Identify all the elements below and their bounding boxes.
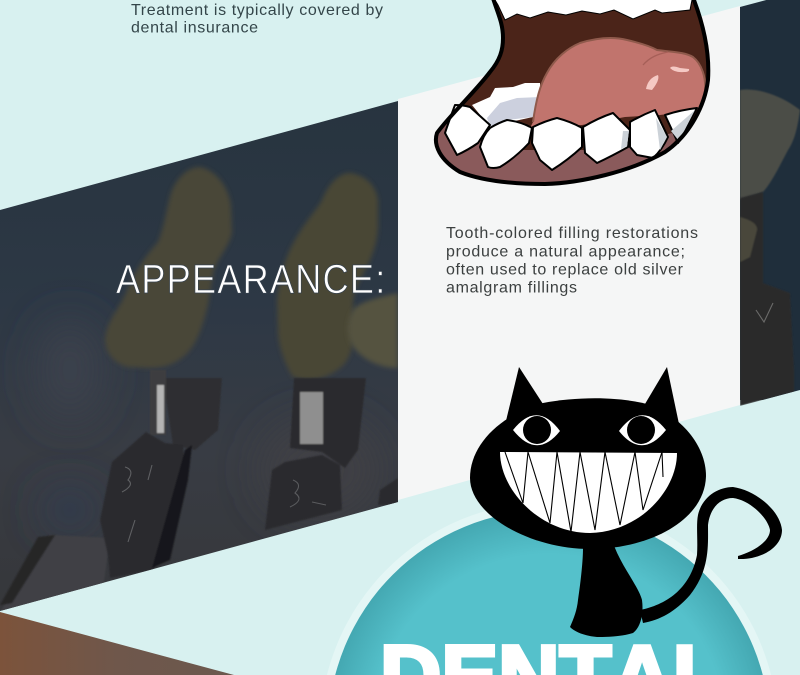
cat left eye xyxy=(513,415,560,445)
shade tab two engraved marks xyxy=(290,480,326,507)
heading: appearance: APPEARANCE: xyxy=(116,257,385,303)
tongue highlights xyxy=(670,66,689,72)
text: insurance note xyxy=(131,2,383,36)
tongue xyxy=(530,38,705,128)
lower teeth xyxy=(445,105,697,170)
text: appearance description: amalgram fillings xyxy=(446,280,577,296)
text: insurance note: Treatment is typically covered by xyxy=(131,2,383,19)
text: insurance note: dental insurance xyxy=(131,20,258,36)
shade tab right xyxy=(740,192,794,406)
badge: teal circle xyxy=(320,502,778,675)
panel: brown corner photo xyxy=(0,612,234,675)
text: appearance description: Tooth-colored filling restorations xyxy=(446,225,698,242)
panel: white text panel xyxy=(398,6,740,500)
cat right eye xyxy=(619,415,666,445)
cat ears xyxy=(505,367,543,425)
tooth shadows xyxy=(621,110,695,150)
upper teeth xyxy=(492,0,693,20)
tooth sample two xyxy=(277,173,378,380)
illustration: open mouth xyxy=(436,0,708,184)
mouth interior xyxy=(436,0,708,184)
shade tab one engraved marks xyxy=(122,465,152,542)
cat tail xyxy=(640,487,782,623)
panel: appearance photo left xyxy=(0,95,400,615)
illustration: grinning black cat xyxy=(470,367,782,637)
back lower teeth xyxy=(472,83,541,127)
cat body xyxy=(570,540,643,637)
cat head xyxy=(470,398,706,549)
cat grin teeth xyxy=(500,452,677,533)
text: appearance description: produce a natural appearance; xyxy=(446,244,685,260)
text: appearance description: often used to replace old silver xyxy=(446,262,684,278)
shade tab one xyxy=(100,370,222,578)
panel: appearance photo right xyxy=(740,0,800,406)
tooth sample right xyxy=(740,90,800,200)
tooth sample three xyxy=(348,293,398,368)
tooth sample one xyxy=(105,167,232,368)
mouth outline xyxy=(436,0,708,184)
lower gum xyxy=(436,120,685,184)
text: appearance description xyxy=(446,225,698,296)
shade tab two xyxy=(265,378,398,530)
